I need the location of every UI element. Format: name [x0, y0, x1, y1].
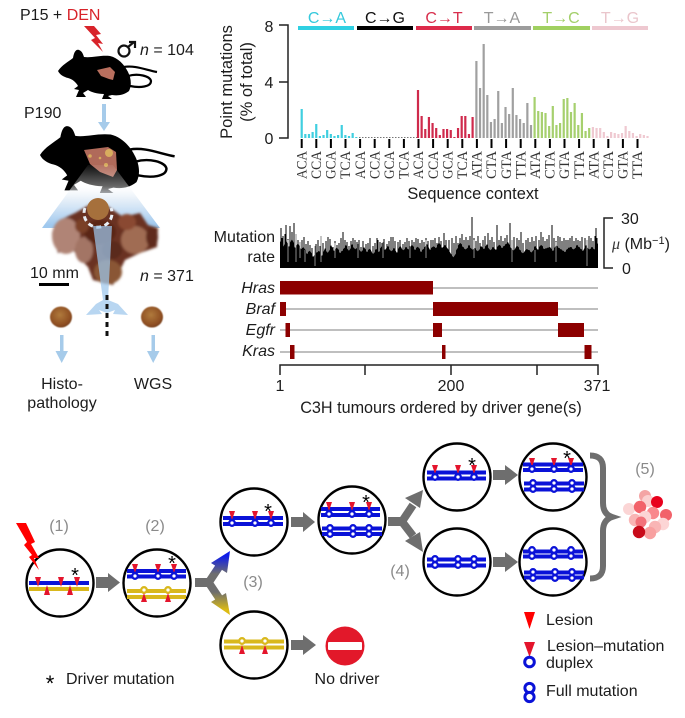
- sequence context labels: GCA: [382, 151, 398, 179]
- arrow: lineage A: [493, 465, 518, 485]
- label: Histopathology: Histo-: [41, 376, 83, 393]
- arrow: gold strand to no driver: [291, 635, 316, 655]
- bars: T to G: [593, 126, 648, 138]
- sequence context labels: CCA: [367, 151, 383, 179]
- gene labels: Egfr: [246, 322, 276, 339]
- chart: point mutations by sequence context: [218, 10, 648, 203]
- sequence context labels: GTA: [616, 150, 632, 179]
- bars: C to T: [418, 90, 473, 138]
- gene row lines: [280, 288, 598, 352]
- mutation class headers: [308, 10, 639, 27]
- sequence context labels: CTA: [601, 150, 617, 179]
- sequence context labels: TTA: [572, 150, 588, 179]
- step 1 circle: [26, 550, 94, 616]
- sequence context labels: ATA: [528, 150, 544, 179]
- arrow: split into two lineages: [388, 490, 423, 552]
- sequence context labels: CTA: [543, 150, 559, 179]
- lineage A first circle: *: [468, 455, 476, 477]
- tumour axis title: C3H tumours ordered by driver gene(s): [300, 399, 582, 417]
- bars: C to G: [359, 136, 417, 138]
- lineage A second circle: *: [563, 448, 571, 470]
- sequence context labels: GTA: [557, 150, 573, 179]
- arrow: blue strand to duplicated: [291, 512, 315, 532]
- histogram body: [280, 238, 598, 268]
- step 2 circle: *: [168, 553, 176, 575]
- sequence context labels: GCA: [324, 151, 340, 179]
- label: n = 371: n = 371: [140, 268, 194, 285]
- mutation class headers: C→T: [425, 10, 463, 27]
- gene labels: [241, 280, 277, 360]
- x axis title: Sequence context: [407, 185, 539, 203]
- sequence context labels: TTA: [630, 150, 646, 179]
- tumour axis: [280, 365, 598, 375]
- photo: liver with tumours: [52, 198, 158, 285]
- sequence context labels: ATA: [470, 150, 486, 179]
- rate scale labels: [611, 211, 670, 278]
- duplicated strand circle: *: [362, 492, 370, 514]
- mutation class headers: T→A: [484, 10, 521, 27]
- step label (1): (1): [49, 518, 69, 535]
- arrow: split into blue and gold strands: [195, 551, 230, 615]
- dotted divider between samples: [106, 295, 108, 337]
- x axis ticks: [302, 139, 637, 148]
- icon: lightning hitting cell: [16, 523, 39, 570]
- bars: C to A: [302, 109, 356, 138]
- Kras bars: [290, 345, 592, 359]
- sequence context labels: TCA: [397, 150, 413, 179]
- chart: driver gene matrix: [241, 280, 610, 417]
- y tick labels: [265, 19, 274, 148]
- label: Histopathology: pathology: [27, 395, 97, 412]
- y tick labels: 0: [265, 131, 274, 148]
- y tick labels: 8: [265, 19, 274, 36]
- label: n = 104: n = 104: [140, 42, 194, 59]
- label: Driver mutation: Driver mutation: [66, 671, 174, 688]
- arrow: lineage B: [493, 552, 518, 572]
- mutation class headers: C→G: [365, 10, 405, 27]
- sequence context labels: TTA: [513, 150, 529, 179]
- icon: mouse at P190: [40, 126, 175, 193]
- step 1 circle: *: [71, 565, 79, 587]
- sequence context labels: ACA: [294, 151, 310, 179]
- sequence context labels: ACA: [411, 151, 427, 179]
- rate scale labels: ): [665, 236, 670, 253]
- arrow: tumour to samples, split: [86, 226, 128, 315]
- brace: [590, 456, 612, 578]
- bars: T to A: [476, 44, 531, 138]
- step label (4): (4): [390, 563, 410, 580]
- sequence context labels: GTA: [499, 150, 515, 179]
- legend: lesion: Lesion: [546, 612, 593, 629]
- y axis title: [218, 25, 256, 139]
- photo: left tumour sample: [50, 306, 72, 328]
- photo: right tumour sample: [141, 306, 163, 328]
- star symbol: driver mutation: *: [46, 671, 55, 696]
- histogram dense spikes: [282, 232, 597, 268]
- tumour axis ticks labels: 1: [276, 378, 285, 395]
- scale bar label: 10 mm: 10 mm: [30, 265, 79, 282]
- step label (2): (2): [145, 518, 165, 535]
- y axis title: (% of total): [238, 42, 256, 122]
- gene labels: Braf: [246, 301, 277, 318]
- grey spikes: [288, 234, 587, 266]
- sequence context labels: TCA: [338, 150, 354, 179]
- scale bar: [39, 283, 69, 286]
- gold strand circle: [220, 612, 288, 678]
- label: P190: P190: [24, 105, 61, 122]
- step label (5): (5): [635, 461, 655, 478]
- icon: DEN lightning bolt: [84, 26, 103, 52]
- Braf bars: [280, 302, 558, 316]
- label: Mutation rate: Mutation: [214, 229, 275, 246]
- rate scale bracket: [604, 218, 613, 268]
- legend: lesion-mutation duplex: [524, 638, 664, 672]
- arrow: to histopathology: [56, 335, 68, 363]
- label: WGS: WGS: [134, 376, 172, 393]
- sequence context labels: [294, 150, 646, 179]
- mutation class headers: T→G: [601, 10, 639, 27]
- gene labels: Hras: [241, 280, 275, 297]
- histogram spikes: [281, 217, 596, 268]
- blue strand circle: [220, 488, 288, 556]
- sequence context labels: ACA: [353, 151, 369, 179]
- legend: lesion-mutation duplex: Lesion–mutation: [547, 638, 664, 655]
- label: Mutation rate: rate: [247, 249, 275, 266]
- label: No driver: No driver: [315, 671, 380, 688]
- sequence context labels: TCA: [455, 150, 471, 179]
- tumour axis ticks labels: 200: [438, 378, 464, 395]
- step label (3): (3): [243, 574, 263, 591]
- legend: lesion-mutation duplex: duplex: [546, 655, 593, 672]
- lineage B second circle: [520, 528, 586, 596]
- rate scale labels: 30: [621, 211, 639, 228]
- mutation class headers: C→A: [308, 10, 346, 27]
- sequence context labels: CCA: [309, 151, 325, 179]
- mutation class colour bars: [298, 26, 648, 30]
- sequence context labels: ATA: [586, 150, 602, 179]
- chart: mutation rate: [214, 211, 670, 278]
- icon: male symbol: [118, 42, 135, 56]
- sequence context labels: CTA: [484, 150, 500, 179]
- step 2 circle: [124, 550, 190, 616]
- y tick labels: 4: [265, 75, 274, 92]
- blue strand circle: *: [264, 501, 272, 523]
- sequence context labels: CCA: [426, 151, 442, 179]
- rate scale labels: μ (Mb: [612, 236, 652, 253]
- arrow: to WGS: [147, 335, 160, 363]
- y axis: [279, 25, 288, 138]
- legend: full mutation: Full mutation: [546, 683, 638, 700]
- duplicated strand circle: [318, 486, 386, 554]
- tumour cell cluster: [623, 490, 672, 539]
- y axis title: Point mutations: [218, 25, 236, 139]
- gene labels: Kras: [242, 343, 275, 360]
- arrow: P15 to P190: [98, 104, 110, 131]
- rate scale labels: −1: [652, 235, 665, 247]
- lineage B first circle: [424, 528, 490, 596]
- magnification cone: [42, 165, 160, 228]
- tumour axis ticks labels: [276, 378, 610, 395]
- mutation class headers: T→C: [542, 10, 580, 27]
- rate scale labels: 0: [622, 261, 631, 278]
- tumour axis ticks labels: 371: [584, 378, 610, 395]
- label: P15 + DEN: P15 + DEN: [20, 7, 100, 24]
- legend: lesion: [524, 612, 593, 629]
- Egfr bars: [286, 323, 584, 337]
- sequence context labels: GCA: [440, 151, 456, 179]
- icon: mouse at P15: [58, 50, 157, 99]
- icon: no entry: [326, 626, 364, 666]
- arrow: step 1 to 2: [96, 573, 120, 592]
- lineage A first circle: [424, 444, 490, 510]
- Hras bars: [280, 281, 433, 294]
- bars: T to C: [535, 97, 589, 138]
- lineage A second circle: [520, 444, 586, 510]
